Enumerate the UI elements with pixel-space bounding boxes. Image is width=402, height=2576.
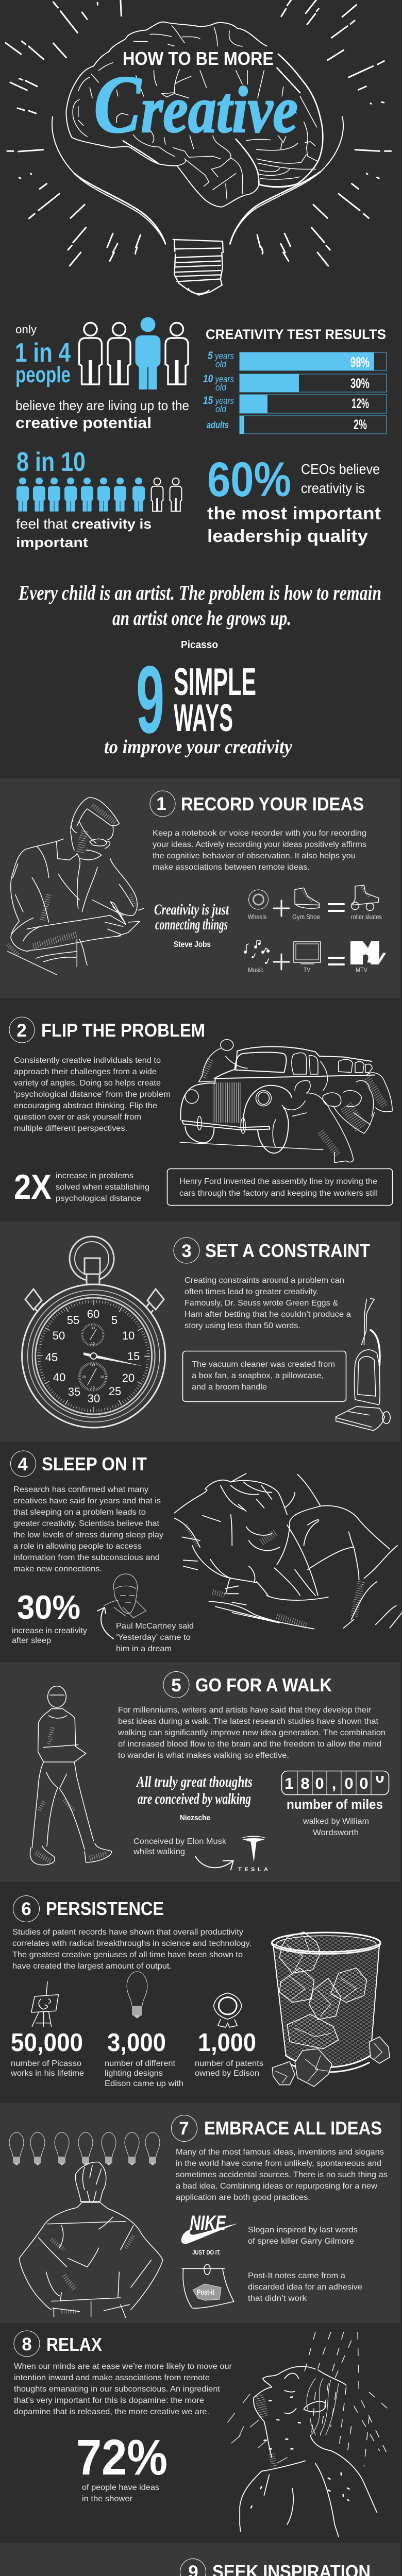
callout: Henry Ford: cars through the factory and keeping the workers still xyxy=(179,1189,378,1198)
step number 7 xyxy=(171,2115,197,2141)
quote: Niezsche: Niezsche xyxy=(180,1814,210,1822)
stat: 180,000 miles counter: 1 xyxy=(284,1774,294,1792)
body text: Famously, Dr. Seuss wrote Green Eggs & xyxy=(185,1299,338,1308)
illustration: walking man xyxy=(30,1686,112,1865)
stat: 2X: increase in problems xyxy=(56,1172,133,1180)
bar chart: 12% xyxy=(351,396,369,411)
title backing xyxy=(119,49,277,67)
step number 4 xyxy=(10,1451,36,1477)
stats: Picasso works xyxy=(10,2029,84,2078)
step number 1: 1 xyxy=(156,794,166,814)
icon: four people xyxy=(79,317,188,389)
body text: Studies of patent records have shown that overall productivity xyxy=(12,1928,243,1937)
body text: Creating constraints around a problem can xyxy=(185,1276,344,1285)
text: leadership quality: the most important xyxy=(207,504,381,523)
text: creativity is important: feel that creativity is xyxy=(16,516,152,532)
text: leadership quality xyxy=(207,504,381,546)
callout: vacuum cleaner xyxy=(182,1351,346,1401)
body text: make new connections. xyxy=(13,1565,102,1573)
icon: Nike logo: NIKE xyxy=(190,2212,226,2234)
icon: stopwatch: 20 xyxy=(82,1376,86,1379)
text: Nike slogan xyxy=(248,2226,358,2246)
body text: that sleeping on a problem leads to xyxy=(13,1508,146,1517)
icon: stopwatch: 30 xyxy=(88,1392,100,1405)
body text: intention inward and make associations from remote xyxy=(14,2374,210,2382)
quote: Steve Jobs: Steve Jobs xyxy=(174,940,211,949)
stats: Picasso works: number of Picasso xyxy=(11,2059,81,2068)
icon: stopwatch: 45 xyxy=(45,1351,58,1364)
icon: stopwatch: 50 xyxy=(53,1329,65,1342)
heading: SLEEP ON IT xyxy=(42,1453,147,1475)
stats: lighting designs: Edison came up with xyxy=(105,2079,183,2088)
quote: Steve Jobs xyxy=(154,901,229,949)
icon: stopwatch: 35 xyxy=(68,1385,80,1398)
text: Post-It origin: Post-It notes came from a xyxy=(248,2272,345,2280)
body text: question over or ask yourself from xyxy=(14,1113,141,1122)
stats: lighting designs: number of different xyxy=(105,2059,176,2068)
text: Post-It origin xyxy=(248,2272,362,2303)
icon: row of light bulbs xyxy=(9,2132,160,2165)
stat: 180,000 miles counter: 0 xyxy=(315,1774,324,1792)
body text: often times lead to greater creativity. xyxy=(185,1287,319,1296)
body text: ‘psychological distance’ from the problem xyxy=(14,1090,171,1099)
stat: 8 in 10: 8 in 10 xyxy=(16,447,86,477)
icon: brain folds xyxy=(73,26,318,199)
illustration: man writing in notebook xyxy=(8,798,144,975)
panel: 8 relax xyxy=(14,2331,392,2536)
stat: 2X: solved when establishing xyxy=(56,1183,149,1192)
text: only: only xyxy=(15,323,37,336)
body text: correlates with radical breakthroughs in science and technology. xyxy=(12,1939,252,1948)
text: Paul McCartney: him in a dream xyxy=(116,1645,172,1653)
body text: When our minds are at ease we’re more likely to move our xyxy=(14,2362,232,2371)
text: Nike slogan: of spree killer Garry Gilmore xyxy=(248,2237,354,2246)
text: Elon Musk xyxy=(133,1837,227,1856)
body text: story using less than 50 words. xyxy=(185,1321,300,1330)
icon: stopwatch: 15 xyxy=(91,1386,95,1389)
quote: Picasso: an artist once he grows up. xyxy=(112,606,291,630)
text: Post-It origin: that didn’t work xyxy=(248,2294,307,2303)
body text xyxy=(176,2148,388,2202)
icon: bulb screw base xyxy=(173,240,223,295)
stat: 2X: 2X xyxy=(14,1167,52,1207)
step number 7: 7 xyxy=(179,2119,189,2139)
diagram: wheels + gym shoe = roller skates: roller skates xyxy=(351,913,382,921)
step number 9 xyxy=(180,2558,206,2576)
body text: greater creativity. Scientists believe that xyxy=(13,1519,160,1528)
text: creative potential: creative potential xyxy=(15,414,152,432)
bar chart: 98% xyxy=(350,354,370,370)
icon: stopwatch: 15 xyxy=(91,1342,95,1346)
step number 1 xyxy=(150,791,175,817)
quote: Steve Jobs: connecting things xyxy=(155,916,228,933)
step number 3: 3 xyxy=(181,1241,192,1261)
stat: 180,000 miles counter: number of miles xyxy=(287,1797,383,1812)
heading: 9 simple ways xyxy=(104,647,292,758)
quote: Picasso: Picasso xyxy=(181,639,218,651)
callout: Henry Ford xyxy=(167,1168,393,1206)
quote: Niezsche xyxy=(136,1773,253,1822)
panel: 8 in 10 stat xyxy=(16,447,181,550)
stat: 1 in 4 people: people xyxy=(15,362,71,387)
panel: 4 sleep on it xyxy=(10,1451,402,1653)
stats: lighting designs xyxy=(105,2029,183,2088)
heading: 9 simple ways: SIMPLE xyxy=(174,660,256,703)
body text: Research has confirmed what many xyxy=(13,1485,148,1494)
body text: a role in allowing people to access xyxy=(13,1542,142,1551)
panel: 60% CEOs stat xyxy=(207,452,381,546)
body text xyxy=(118,1706,386,1760)
heading: FLIP THE PROBLEM xyxy=(41,1020,205,1041)
step number 8 xyxy=(14,2331,40,2357)
body text: a bad idea. Combining ideas or repurposing for a new xyxy=(176,2182,377,2191)
step number 6 xyxy=(13,1896,39,1922)
diagram: wheels + gym shoe = roller skates xyxy=(248,885,382,921)
icon: stopwatch: 10 xyxy=(100,1376,104,1379)
body text: multiple different perspectives. xyxy=(14,1124,127,1133)
heading: PERSISTENCE xyxy=(46,1898,164,1919)
quote: Steve Jobs: Creativity is just xyxy=(154,901,229,918)
text: Paul McCartney: Paul McCartney said xyxy=(116,1622,194,1631)
stat: 2X: psychological distance xyxy=(56,1194,141,1203)
stat: 30%: increase in creativity xyxy=(12,1626,87,1635)
text: CEOs believe: creativity is xyxy=(301,480,365,496)
body text: The greatest creative geniuses of all time have been shown to xyxy=(12,1951,243,1959)
title: Creative: Creative xyxy=(94,58,298,150)
text: CEOs believe: CEOs believe xyxy=(301,461,380,477)
body text: the low levels of stress during sleep play xyxy=(13,1531,163,1539)
text: Elon Musk: Conceived by Elon Musk xyxy=(133,1837,227,1846)
stat: 30%: after sleep xyxy=(12,1636,51,1645)
stat: 30% xyxy=(12,1588,87,1645)
stats: Picasso works: 50,000 xyxy=(11,2029,83,2057)
body text: information from the subconscious and xyxy=(13,1553,160,1562)
heading: CREATIVITY TEST RESULTS xyxy=(206,327,386,342)
callout: vacuum cleaner: and a broom handle xyxy=(192,1383,267,1392)
quote: Niezsche: All truly great thoughts xyxy=(136,1773,253,1790)
icon: stopwatch: 30 xyxy=(91,1327,95,1330)
arrow: to Paul McCartney xyxy=(97,1607,113,1639)
heading: RELAX xyxy=(46,2334,102,2355)
text: Elon Musk: whilst walking xyxy=(133,1848,185,1856)
icon: ten people xyxy=(16,478,181,512)
illustration: waste bin with paper xyxy=(272,1932,390,2087)
illustration: man from behind xyxy=(19,2162,163,2317)
icon: Tesla logo: TESLA xyxy=(238,1867,268,1873)
icon: stopwatch: 15 xyxy=(127,1350,140,1363)
heading: 9 simple ways: WAYS xyxy=(174,696,233,739)
stat: 180,000 miles counter: 0 xyxy=(359,1774,368,1792)
body text: encouraging abstract thinking. Flip the xyxy=(14,1101,157,1110)
step number 5: 5 xyxy=(171,1675,181,1696)
step number 6: 6 xyxy=(21,1899,31,1919)
stats: Edison patents: owned by Edison xyxy=(195,2069,259,2078)
body text: best ideas during a walk. The latest research studies have shown that xyxy=(118,1717,379,1726)
step number 4: 4 xyxy=(18,1454,28,1475)
bar chart: 15 years xyxy=(203,395,234,406)
heading: 9 simple ways: to improve your creativity xyxy=(104,736,292,758)
diagram: music + tv = mtv: Music xyxy=(248,966,263,974)
stats: Edison patents xyxy=(195,2029,263,2078)
bar chart: old xyxy=(215,382,227,393)
body text: Many of the most famous ideas, inventions and slogans xyxy=(176,2148,384,2157)
diagram: music + tv = mtv: TV xyxy=(365,950,386,965)
step number 2 xyxy=(9,1017,35,1043)
icon: light bulb xyxy=(127,1972,147,2019)
bar chart: 10 years xyxy=(203,373,234,385)
body text xyxy=(12,1928,252,1971)
icon: vacuum cleaner xyxy=(336,1299,390,1431)
body text: For millenniums, writers and artists have said that they develop their xyxy=(118,1706,372,1715)
icon: Paul McCartney portrait xyxy=(104,1574,146,1618)
stats: Edison patents: number of patents xyxy=(195,2059,263,2068)
stat: 72%: of people have ideas xyxy=(82,2483,159,2492)
icon: light rays xyxy=(6,0,391,266)
stat: 1 in 4 people: 1 in 4 xyxy=(15,338,71,368)
icon: post-it note: Post-it xyxy=(197,2288,214,2297)
icon: easel xyxy=(31,1982,58,2026)
body text: thoughts emanating in our subconscious. An ingredient xyxy=(14,2385,221,2394)
text: Post-It origin: discarded idea for an adhesive xyxy=(248,2283,362,2292)
step number 8: 8 xyxy=(22,2334,32,2354)
icon: Tesla logo xyxy=(238,1836,268,1873)
body text xyxy=(14,1056,171,1133)
arrow: to Tesla xyxy=(195,1856,233,1870)
icon: stopwatch: 25 xyxy=(109,1385,121,1398)
heading: GO FOR A WALK xyxy=(195,1674,332,1696)
step number 3 xyxy=(174,1238,199,1263)
panel: 6 persistence xyxy=(10,1896,390,2088)
text: Paul McCartney: ‘Yesterday’ came to xyxy=(116,1633,191,1642)
heading: 9 simple ways: 9 xyxy=(136,647,164,753)
bar chart: old xyxy=(215,404,227,414)
panel: hero brain in light bulb xyxy=(6,0,391,295)
body text xyxy=(185,1276,351,1330)
panel: 5 go for a walk xyxy=(0,1662,400,1882)
body text: approach their challenges from a wide xyxy=(14,1067,157,1076)
stats: lighting designs: lighting designs xyxy=(105,2069,163,2078)
body text: to wander is what makes walking so effective. xyxy=(118,1751,289,1760)
text: CEOs believe xyxy=(301,461,380,496)
panel: 7 embrace all ideas xyxy=(0,2103,400,2323)
panel: 2 flip the problem xyxy=(9,1017,393,1207)
body text: the cognitive behavior of observation. It also helps you xyxy=(153,852,356,860)
text: creativity is important: important xyxy=(16,535,88,550)
stat: 72%: 72% xyxy=(76,2429,167,2485)
icon: patent seal xyxy=(213,1993,242,2027)
body text xyxy=(14,2362,232,2416)
body text: in the world have come from unlikely, spontaneous and xyxy=(176,2159,381,2168)
diagram: music + tv = mtv xyxy=(244,941,386,974)
icon: stopwatch: 60 xyxy=(87,1308,99,1320)
stat: 2X xyxy=(14,1167,149,1207)
stat: 60%: 60% xyxy=(207,452,291,507)
body text xyxy=(13,1485,163,1573)
icon: stopwatch: 20 xyxy=(122,1371,135,1384)
panel: creativity test results xyxy=(203,327,387,434)
icon: stopwatch: 40 xyxy=(53,1371,65,1384)
stat: 180,000 miles counter xyxy=(281,1768,389,1837)
body text: of increased blood flow to the brain and the freedom to allow the mind xyxy=(118,1740,381,1749)
body text: your ideas. Actively recording your ideas positively affirms xyxy=(153,840,366,849)
bar chart: 30% xyxy=(350,376,370,391)
text: leadership quality: leadership quality xyxy=(207,527,368,546)
text: Paul McCartney xyxy=(116,1622,194,1653)
bar chart: 2% xyxy=(354,417,367,432)
panel: 1 record your ideas xyxy=(0,778,400,998)
text: creative potential: believe they are living up to the xyxy=(15,398,189,413)
callout: vacuum cleaner: The vacuum cleaner was created from xyxy=(192,1360,335,1369)
body text: variety of angles. Doing so helps create xyxy=(14,1079,161,1088)
callout: vacuum cleaner: a box fan, a soapbox, a pillowcase, xyxy=(192,1371,324,1380)
stats: Picasso works: works in his lifetime xyxy=(10,2069,84,2078)
icon: brain xyxy=(66,22,323,207)
stat: 30%: 30% xyxy=(17,1588,80,1626)
body text: make associations between remote ideas. xyxy=(153,863,310,872)
panel: 1 in 4 people stat xyxy=(15,317,189,432)
stat: 180,000 miles counter: , xyxy=(332,1774,336,1792)
icon: stopwatch: 5 xyxy=(111,1314,118,1327)
illustration: woman in shower xyxy=(226,2332,392,2536)
callout: Henry Ford: Henry Ford invented the assembly line by moving the xyxy=(179,1177,377,1186)
icon: stopwatch: 55 xyxy=(67,1314,79,1327)
diagram: music + tv = mtv: MTV xyxy=(356,966,367,974)
body text: creatives have said for years and that is xyxy=(13,1497,161,1505)
panel: 9 seek inspiration xyxy=(0,2543,400,2576)
body text: dopamine that is released, the more creative we are. xyxy=(14,2408,209,2416)
quote: Niezsche: are conceived by walking xyxy=(138,1790,251,1807)
body text: Consistently creative individuals tend to xyxy=(14,1056,161,1065)
icon: Nike logo: JUST DO IT. xyxy=(192,2249,221,2256)
body text: have created the largest amount of output. xyxy=(12,1962,172,1971)
diagram: music + tv = mtv: TV xyxy=(304,966,310,974)
text: creativity is important xyxy=(16,516,152,550)
stat: 180,000 miles counter: 0 xyxy=(375,1768,384,1786)
icon: stopwatch: 30 xyxy=(91,1364,95,1367)
stat: 180,000 miles counter: 8 xyxy=(300,1774,310,1792)
text: creative potential xyxy=(15,398,189,432)
text: Nike slogan: Slogan inspired by last words xyxy=(248,2226,358,2234)
icon: stopwatch: 10 xyxy=(122,1329,135,1342)
body text: that’s very important for this is dopamine: the more xyxy=(14,2396,204,2405)
heading: EMBRACE ALL IDEAS xyxy=(204,2117,382,2139)
body text: sometimes accidental sources. There is no such thing as xyxy=(176,2171,388,2179)
bar chart: 5 years xyxy=(208,350,234,362)
icon: stopwatch xyxy=(22,1236,165,1428)
stats: Edison patents: 1,000 xyxy=(198,2029,256,2057)
stat: 72%: in the shower xyxy=(82,2495,133,2503)
stats: lighting designs: 3,000 xyxy=(107,2029,166,2057)
diagram: wheels + gym shoe = roller skates: Gym Shoe xyxy=(292,913,320,921)
bar chart: old xyxy=(215,359,227,369)
illustration: car and workers xyxy=(180,1040,392,1163)
icon: Nike logo xyxy=(181,2212,238,2256)
heading: RECORD YOUR IDEAS xyxy=(181,793,364,815)
step number 2: 2 xyxy=(16,1021,27,1041)
body text: application are both good practices. xyxy=(176,2193,310,2202)
title: HOW TO BE MORE xyxy=(123,48,274,69)
stat: 180,000 miles counter: 0 xyxy=(344,1774,354,1792)
step number 5 xyxy=(163,1671,189,1698)
bar chart xyxy=(203,350,387,434)
heading: SET A CONSTRAINT xyxy=(205,1240,370,1261)
body text: Ham after betting that he couldn’t produce a xyxy=(185,1310,351,1319)
icon: light bulb glass outline xyxy=(52,117,343,244)
body text: Keep a notebook or voice recorder with you for recording xyxy=(153,829,366,838)
stat: 1 in 4 people xyxy=(15,338,71,387)
illustration: sleeping man xyxy=(174,1473,402,1629)
diagram: wheels + gym shoe = roller skates: Wheels xyxy=(248,913,266,921)
icon: post-it note xyxy=(182,2264,234,2308)
body text xyxy=(153,829,366,872)
quote: Picasso xyxy=(18,581,381,651)
stat: 180,000 miles counter: Wordsworth xyxy=(313,1828,359,1837)
panel: 3 set a constraint xyxy=(0,1222,400,1442)
body text: walking can significantly improve new idea generation. The combination xyxy=(118,1728,386,1737)
stat: 180,000 miles counter: walked by William xyxy=(303,1817,369,1826)
bar chart: adults xyxy=(207,420,229,430)
